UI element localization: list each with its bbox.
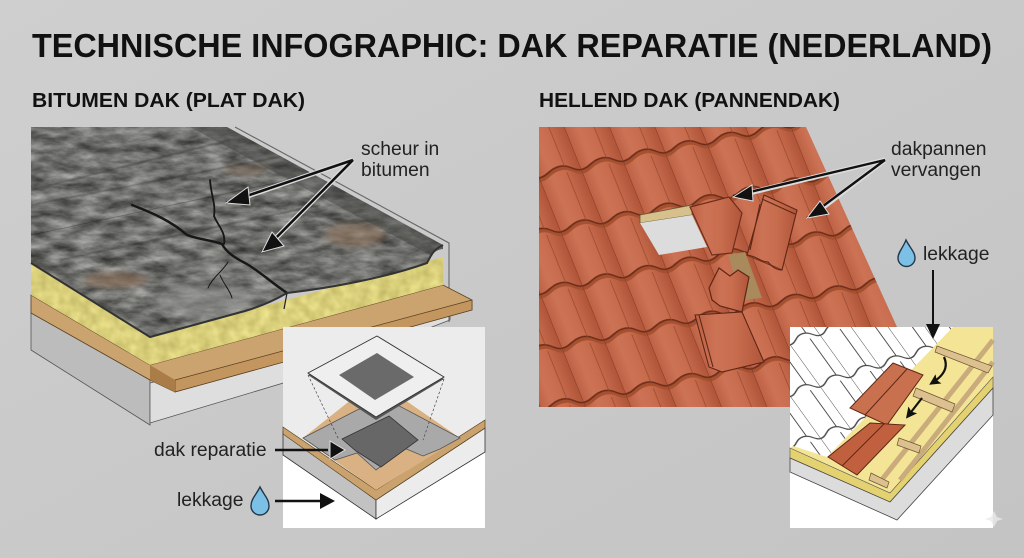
insulation bbox=[790, 327, 993, 493]
replacement tile bbox=[747, 195, 797, 270]
new tile upper bbox=[850, 363, 923, 425]
arrows bbox=[226, 160, 353, 252]
sparkle mark bbox=[985, 511, 1003, 527]
inset: bitumen repair detail bbox=[283, 327, 485, 528]
inset: tile repair detail bbox=[790, 327, 993, 528]
label text: dakpannen bbox=[891, 139, 986, 160]
adjacent tile bbox=[690, 197, 742, 255]
arrows bbox=[733, 160, 885, 218]
label text: vervangen bbox=[891, 160, 981, 181]
callout: dakpannen vervangen bbox=[733, 139, 986, 218]
label text: bitumen bbox=[361, 160, 430, 181]
callout: scheur in bitumen bbox=[226, 139, 439, 252]
bitumen surface bbox=[31, 127, 446, 342]
heading: bitumen dak: BITUMEN DAK (PLAT DAK) bbox=[32, 89, 305, 112]
battens bbox=[869, 346, 992, 488]
title: TECHNISCHE INFOGRAPHIC: DAK REPARATIE (NEDERLAND) bbox=[32, 27, 992, 64]
insulation edge and wall bbox=[790, 377, 993, 520]
exploded patch bbox=[308, 336, 444, 440]
label text: scheur in bbox=[361, 139, 439, 160]
base and wall bbox=[283, 380, 485, 528]
callout: lekkage right bbox=[898, 240, 989, 339]
tile field bbox=[539, 127, 899, 407]
white tile field bbox=[790, 327, 960, 462]
crack bbox=[132, 180, 287, 298]
roof edge lines bbox=[31, 245, 443, 337]
curved arrows bbox=[908, 357, 946, 416]
arrow down bbox=[926, 270, 940, 339]
arrow bbox=[275, 493, 335, 509]
wood deck bbox=[31, 285, 472, 392]
insulation layer bbox=[31, 257, 443, 365]
label text: lekkage bbox=[177, 490, 243, 511]
inset background bbox=[283, 327, 485, 528]
inset background bbox=[790, 327, 993, 528]
callout: dak reparatie bbox=[154, 440, 345, 461]
roof hole with batten bbox=[640, 205, 762, 300]
panel: bitumen flat roof illustration bbox=[31, 127, 472, 425]
membrane bbox=[303, 400, 460, 470]
callout: lekkage left bbox=[177, 487, 335, 515]
lower tile bbox=[695, 312, 764, 372]
broken tile bbox=[709, 268, 749, 312]
water drop icon bbox=[898, 240, 915, 266]
label text: lekkage bbox=[923, 244, 989, 265]
label text: dak reparatie bbox=[154, 440, 267, 461]
new tile lower bbox=[828, 423, 905, 475]
rafters bbox=[880, 340, 993, 482]
water drop icon bbox=[251, 487, 269, 515]
heading: hellend dak: HELLEND DAK (PANNENDAK) bbox=[539, 89, 840, 112]
patch bbox=[342, 416, 418, 467]
panel: pitched tile roof illustration bbox=[539, 127, 899, 407]
arrow bbox=[275, 441, 345, 459]
building wall bbox=[31, 127, 450, 425]
